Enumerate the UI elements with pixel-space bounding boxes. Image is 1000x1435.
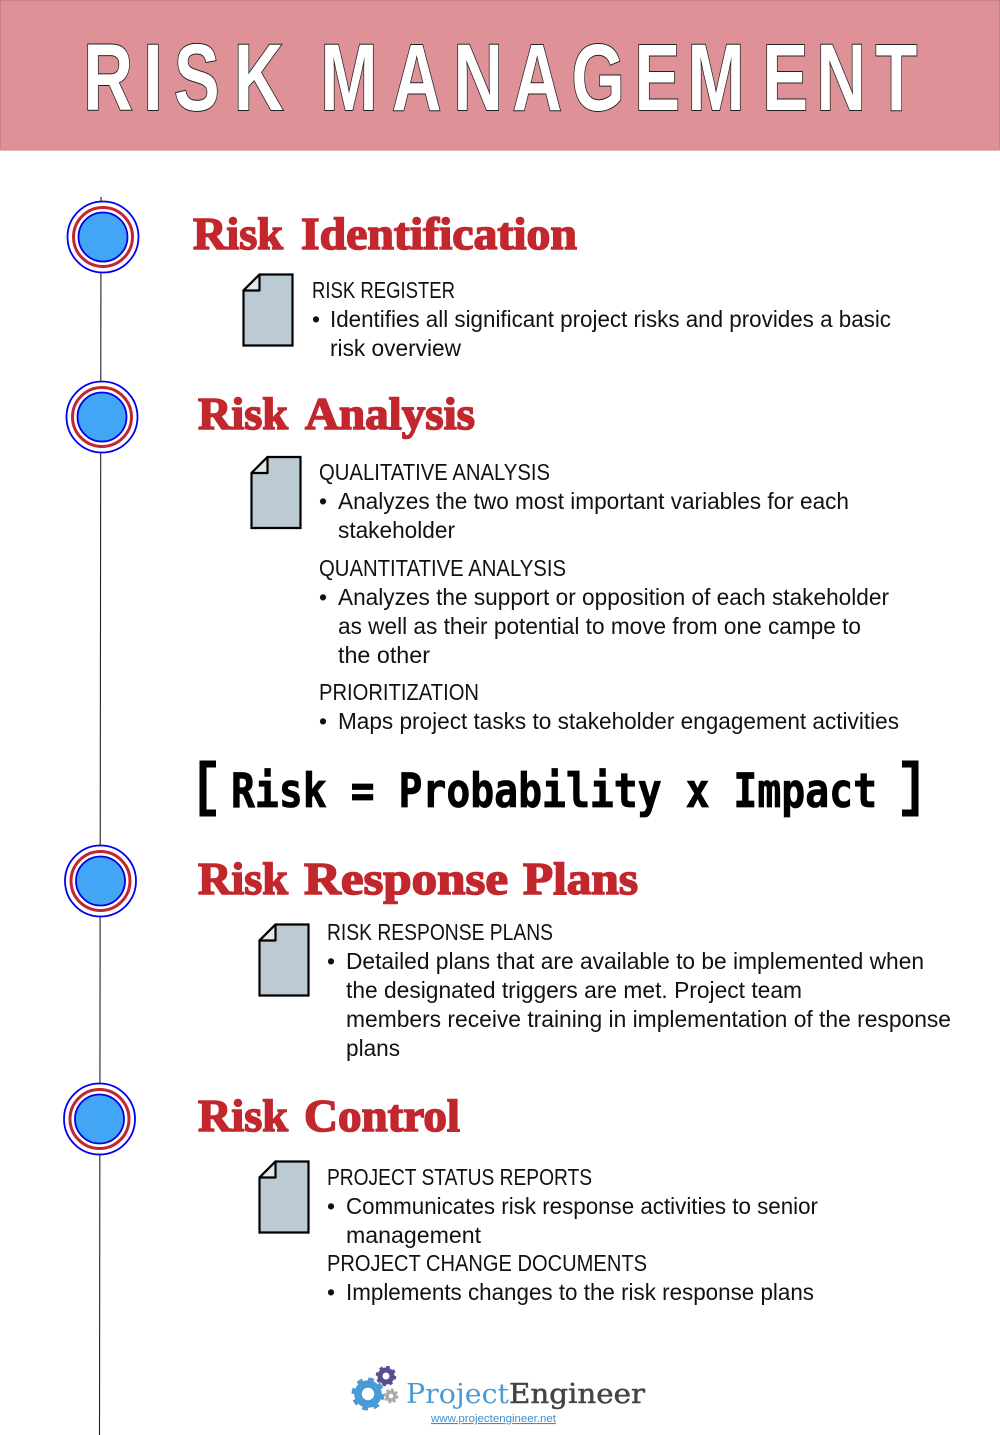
icon: document bbox=[260, 1162, 308, 1232]
formula: Risk = Probability x Impact bbox=[231, 764, 877, 819]
heading: Risk bbox=[193, 208, 283, 259]
heading: Identification bbox=[301, 208, 577, 259]
section: risk response plans bbox=[198, 853, 951, 1061]
text block: • bbox=[319, 488, 327, 514]
heading: Risk bbox=[198, 1090, 288, 1141]
text block: Maps project tasks to stakeholder engagement activities bbox=[338, 708, 899, 734]
heading: Risk bbox=[198, 853, 288, 904]
text block: management bbox=[346, 1222, 482, 1248]
text block: Implements changes to the risk response plans bbox=[346, 1279, 814, 1305]
text block bbox=[319, 459, 899, 734]
node 1 bbox=[68, 202, 138, 272]
text block: PROJECT STATUS REPORTS bbox=[327, 1164, 592, 1190]
heading: Risk bbox=[198, 388, 288, 439]
timeline line bbox=[100, 197, 101, 1435]
icon: document bbox=[252, 457, 300, 528]
header banner bbox=[0, 0, 1000, 150]
text block: • bbox=[319, 708, 327, 734]
wordmark: Project bbox=[406, 1379, 509, 1410]
text block: • bbox=[327, 948, 335, 974]
node 3 bbox=[65, 846, 136, 916]
text block: QUALITATIVE ANALYSIS bbox=[319, 459, 550, 485]
heading: Control bbox=[304, 1090, 460, 1141]
section: risk identification bbox=[193, 208, 891, 361]
text block: the other bbox=[338, 642, 430, 668]
text block bbox=[327, 1164, 818, 1305]
text block: Identifies all significant project risks and provides a basic bbox=[330, 306, 891, 332]
heading: Response bbox=[304, 853, 508, 904]
text block: risk overview bbox=[330, 335, 461, 361]
section: risk control bbox=[198, 1090, 818, 1305]
text block: Analyzes the support or opposition of each stakeholder bbox=[338, 584, 889, 610]
url: www.projectengineer.net bbox=[430, 1413, 556, 1425]
text block: Communicates risk response activities to senior bbox=[346, 1193, 818, 1219]
text block: • bbox=[319, 584, 327, 610]
node 4 bbox=[64, 1084, 135, 1154]
text block: PROJECT CHANGE DOCUMENTS bbox=[327, 1250, 647, 1276]
text block: RISK REGISTER bbox=[312, 277, 455, 303]
text block: stakeholder bbox=[338, 517, 455, 543]
icon: document bbox=[244, 274, 292, 346]
text block: Analyzes the two most important variables for each bbox=[338, 488, 849, 514]
text block: • bbox=[327, 1193, 335, 1219]
text block bbox=[312, 277, 891, 361]
text block: PRIORITIZATION bbox=[319, 679, 479, 705]
text block: QUANTITATIVE ANALYSIS bbox=[319, 555, 566, 581]
heading: Analysis bbox=[305, 388, 475, 439]
section: risk analysis bbox=[198, 388, 899, 734]
heading: Plans bbox=[523, 853, 638, 904]
text block: • bbox=[327, 1279, 335, 1305]
text block bbox=[327, 919, 951, 1061]
text block: • bbox=[312, 306, 320, 332]
text block: as well as their potential to move from one campe to bbox=[338, 613, 861, 639]
text block: RISK RESPONSE PLANS bbox=[327, 919, 553, 945]
text block: the designated triggers are met. Project team bbox=[346, 977, 802, 1003]
icon: document bbox=[260, 924, 308, 996]
icon: gears bbox=[354, 1367, 398, 1408]
text block: plans bbox=[346, 1035, 400, 1061]
node 2 bbox=[66, 382, 138, 452]
logo bbox=[354, 1367, 645, 1425]
text block: Detailed plans that are available to be implemented when bbox=[346, 948, 924, 974]
logo: Engineer bbox=[509, 1379, 645, 1410]
text block: members receive training in implementation of the response bbox=[346, 1006, 951, 1032]
title: RISK MANAGEMENT bbox=[84, 24, 917, 131]
